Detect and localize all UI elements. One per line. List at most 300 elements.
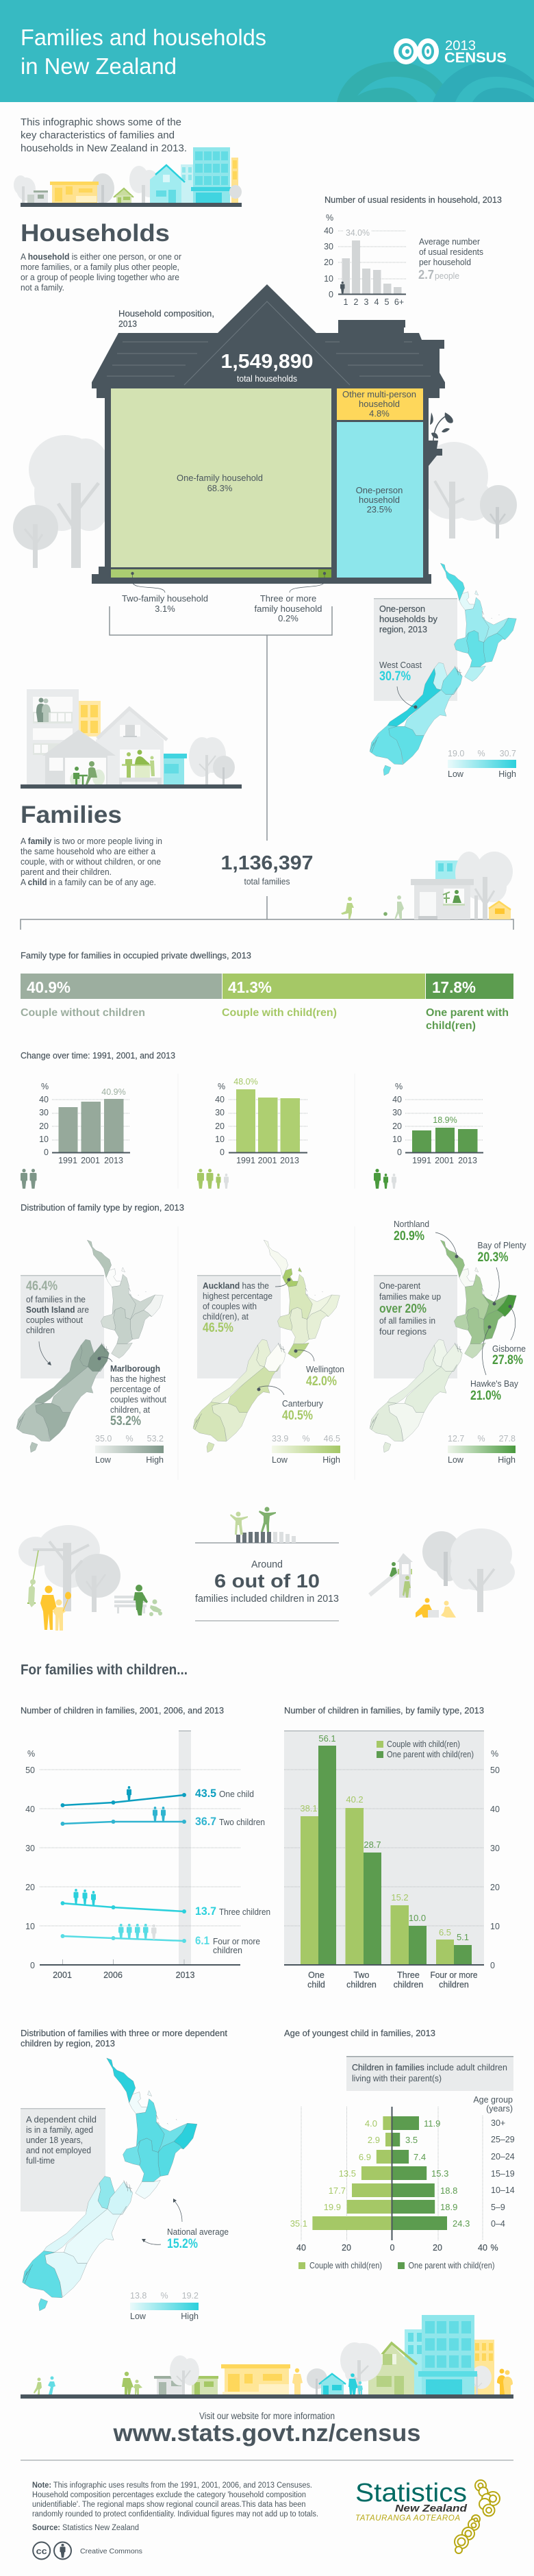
pyramid chart: age of youngest child: 20 [433,2243,442,2253]
bar chart: couple without children over time: % [41,1082,49,1091]
one-family household [111,388,331,567]
line chart: number of children over time: 50 [25,1766,35,1775]
callouts: two-family and three or more: Three or more [260,593,316,604]
map: one parent with children: four regions [379,1327,427,1337]
map: one-person households [370,563,516,779]
total households: 1,549,890 [220,351,314,373]
pyramid chart: age of youngest child: 15.3 [431,2168,448,2179]
pyramid chart: age of youngest child: 13.5 [339,2168,356,2179]
pyramid chart: age of youngest child: 4.0 [365,2118,377,2129]
series: two children [60,1807,265,1828]
pyramid chart: age of youngest child: 20 [342,2243,351,2253]
Statistics New Zealand logo: TATAURANGA AOTEAROA [355,2514,461,2523]
map: couples with children: 42.0% [306,1374,337,1389]
pyramid chart: age of youngest child: 10–14 [491,2185,515,2195]
stacked bar: family type: 41.3% [228,978,272,996]
bar chart: couple with children over time: 40 [215,1095,225,1104]
stacked bar: family type: child(ren) [426,1020,476,1032]
line chart: number of children over time: 2013 [176,1970,194,1980]
two-family household [111,569,318,578]
map: one parent with children: Hawke's Bay [470,1379,519,1389]
panel dividers [178,1074,355,1480]
bar chart: children by family type: 5.1 [457,1932,469,1942]
legend [130,2291,199,2321]
bar chart: couple without children over time: 2001 [81,1156,100,1165]
map: one-person households: households by [379,615,438,624]
series: four or more children: 6.1 [195,1934,209,1947]
heading: Households: Households [21,220,170,247]
map: one parent with children: 27.8% [492,1353,523,1367]
callout box [21,1275,104,1378]
series: two children: 36.7 [195,1815,216,1828]
family definition: A child in a family can be of any age. [21,878,156,887]
census logo: CENSUS [444,50,507,66]
bar chart: one parent over time: 0 [397,1148,402,1157]
chart: usual residents: 6+ [394,297,404,307]
bar chart: children by family type: 50 [490,1766,500,1775]
series: one child: 43.5 [195,1787,216,1800]
bar chart: couple with children over time: 1991 [236,1156,255,1165]
legend: Low [448,769,464,779]
average residents note [418,237,483,282]
intro text: This infographic shows some of the [21,117,181,128]
map: couples with children: 40.5% [282,1409,313,1423]
legend: % [477,1434,485,1444]
stacked bar: family type: 40.9% [27,978,71,996]
map: couples without children: couples without [110,1395,166,1404]
pyramid chart: age of youngest child [284,2029,515,2270]
series: four or more children [60,1924,260,1955]
legend: Low [448,1455,464,1465]
legend: High [146,1455,164,1465]
stacked bar: family type [21,974,513,1032]
legend: 19.0 [448,749,464,758]
bar chart: couple with children over time: 0 [220,1148,225,1157]
note and source: Note: This infographic uses results from the 1991, 2001, 2006, and 2013 Censuses. [32,2481,312,2490]
house: household composition [92,284,453,584]
chart: usual residents: Number of usual residents in household, 2013 [325,195,502,205]
legend: Couple with child(ren) [387,1739,460,1749]
bar chart: couple without children over time: 30 [39,1108,49,1117]
line chart: number of children over time: 2001 [53,1970,72,1980]
pyramid chart: age of youngest child: 24.3 [453,2218,470,2229]
legend: Low [95,1455,112,1465]
average residents note: per household [419,258,471,267]
legend: 19.2 [182,2291,199,2301]
map: couples with children: highest percentage [203,1291,272,1301]
bar chart: couple with children over time: 30 [215,1108,225,1117]
legend: 13.8 [130,2291,147,2301]
creative commons badge: cc [36,2546,47,2556]
household definition: not a family. [21,283,64,293]
bar chart: children by family type: 10 [490,1922,500,1931]
bar chart: children by family type: child [307,1980,325,1990]
heading: distribution by region: Distribution of family type by region, 2013 [21,1203,184,1213]
pyramid chart: age of youngest child: (years) [486,2104,513,2114]
line chart: number of children over time: Number of children in families, 2001, 2006, and 2013 [21,1706,224,1716]
heading: family type: Family type for families in occupied private dwellings, 2013 [21,951,251,961]
line chart: number of children over time: 2006 [103,1970,123,1980]
heading: Families: Families [21,802,122,828]
map: three or more dependent children: is in a family, aged [26,2125,93,2135]
total families: 1,136,397 [220,852,314,874]
census logo: 2013 [445,38,476,53]
bar chart: couple with children over time: 48.0% [233,1077,258,1087]
pyramid chart: age of youngest child: 0–4 [491,2219,505,2229]
illustration: park scene right [370,1528,515,1618]
map: one parent with children: 20.9% [394,1229,424,1243]
heading: distribution of larger families [21,2029,228,2048]
bar chart: children by family type: 0 [490,1961,495,1970]
intro text [21,117,187,154]
bar chart: children by family type: Three [397,1970,420,1980]
line chart: number of children over time: % [27,1749,35,1759]
pyramid chart: age of youngest child: 30+ [491,2118,505,2128]
bar chart: children by family type: Two [354,1970,370,1980]
callout: six out of ten families: 6 out of 10 [214,1570,320,1592]
legend: % [160,2291,168,2301]
intro text: households in New Zealand in 2013. [21,143,187,154]
legend: % [477,749,485,758]
three or more family household [318,569,331,578]
bar chart: children by family type: 15.2 [391,1892,409,1903]
bar chart: couple with children over time: 20 [215,1122,225,1131]
pyramid chart: age of youngest child: 3.5 [405,2135,418,2145]
pyramid chart: age of youngest child: % [490,2243,498,2253]
website call to action: www.stats.govt.nz/census [112,2420,420,2447]
chart: usual residents: 40 [324,226,333,236]
average residents note: of usual residents [419,247,483,257]
icon: one parent with children [374,1169,396,1189]
legend [377,1739,474,1759]
illustration: children playing by house [341,852,513,919]
creative commons badge: Creative Commons [80,2547,142,2555]
title: Families and households [21,25,266,50]
icon: pot plant [429,412,453,466]
legend [95,1434,164,1465]
legend: 35.0 [95,1434,112,1444]
map: couples with children: of couples with [203,1302,257,1311]
average residents note: people [435,271,459,281]
chart: usual residents: 5 [385,297,390,307]
line chart: number of children over time: 30 [25,1844,35,1853]
bar chart: one parent over time [374,1082,483,1189]
map: couples with children: child(ren), at [203,1312,249,1322]
legend: Low [130,2312,147,2321]
stacked bar: family type: Couple with child(ren) [222,1007,337,1019]
pyramid chart: age of youngest child: 40 [478,2243,487,2253]
Statistics New Zealand logo: Statistics [355,2479,467,2507]
bar chart: couple without children over time: 20 [39,1122,49,1131]
callout box [374,598,457,701]
illustration: park scene left [18,1525,162,1631]
bar chart: couple with children over time [197,1077,307,1189]
callout: six out of ten families: Around [251,1559,283,1570]
illustration: city skyline [14,147,242,207]
census logo [394,38,507,66]
total families: total families [244,876,290,887]
icon: couple [21,1169,37,1189]
bar chart: couple without children over time: 10 [39,1135,49,1144]
chart: usual residents: 3 [364,297,369,307]
chart: usual residents: 10 [324,274,333,284]
bar chart: children by family type: Number of children in families, by family type, 2013 [284,1706,484,1716]
map: one-person households: region, 2013 [379,625,427,634]
pyramid chart: age of youngest child: 6.9 [359,2152,371,2162]
household definition: A household is either one person, or one or [21,252,181,262]
legend: Low [272,1455,288,1465]
total families [220,852,314,887]
map: couples without children: children, at [110,1405,150,1415]
map: one parent with children: Northland [394,1219,429,1229]
legend: 27.8 [499,1434,516,1444]
pyramid chart: age of youngest child: 35.1 [290,2218,307,2229]
chart: usual residents: 4 [374,297,379,307]
pyramid chart: age of youngest child: 0 [390,2243,395,2253]
note and source: unidentifiable'. The regional maps show regional council areas.This data has been [32,2501,305,2509]
map: three or more dependent children: under 18 years, [26,2135,83,2145]
map: one-person households: West Coast [379,660,422,670]
legend: One parent with child(ren) [387,1750,474,1759]
bar chart: one parent over time: 40 [392,1095,402,1104]
house: household composition: 2013 [118,319,137,329]
series: four or more children: children [213,1946,242,1955]
bar chart: children by family type [284,1706,500,1990]
bar chart: couple without children over time: 2013 [104,1156,123,1165]
chart: usual residents: 30 [324,242,333,251]
heading: change over time: Change over time: 1991, 2001, and 2013 [21,1051,175,1061]
map: couples without children: has the highest [110,1374,166,1384]
bar chart: children by family type: % [491,1749,498,1759]
bar chart: couple without children over time: 40.9% [101,1087,126,1097]
legend [272,1434,340,1465]
bar chart: couple with children over time: 2001 [258,1156,277,1165]
stacked bar: family type: One parent with [426,1007,509,1019]
map: three or more dependent children: 15.2% [167,2237,198,2251]
legend [448,749,516,779]
note and source: randomly rounded to protect confidentiality. Individual figures may not add up to totals. [32,2510,318,2518]
legend: High [181,2312,199,2321]
chart: usual residents: 34.0% [346,228,370,238]
legend [298,2261,494,2270]
map: couples without children: 46.4% [26,1279,58,1293]
map: couples with children: 46.5% [203,1321,233,1335]
legend [448,1434,516,1465]
line chart: number of children over time: 20 [25,1883,35,1892]
house: household composition: Household composition, [118,309,214,319]
bar chart: children by family type: One [308,1970,325,1980]
bar chart: children by family type: 28.7 [364,1840,381,1850]
bar chart: couple with children over time: 2013 [280,1156,299,1165]
stacked bar: family type: Couple without children [21,1007,145,1019]
heading: distribution of larger families: children by region, 2013 [21,2039,115,2048]
other multi-person household: household [359,399,400,409]
bar chart: children by family type: 30 [490,1844,500,1853]
map: couples without children: of families in the [26,1295,86,1304]
callouts: two-family and three or more: Two-family household [122,593,208,604]
one-family household: One-family household [177,473,263,483]
pyramid chart: age of youngest child: 40 [296,2243,306,2253]
pyramid chart: age of youngest child: 7.4 [414,2152,426,2162]
bar chart: one parent over time: 20 [392,1122,402,1131]
line chart: number of children over time [21,1706,270,1980]
legend: Couple with child(ren) [309,2261,382,2270]
map: couples without children: children [26,1326,55,1335]
footer divider [21,2460,513,2461]
illustration: trees behind house [13,435,517,568]
note and source [32,2481,318,2532]
map: one parent with children: of all families in [379,1316,435,1326]
chart: usual residents: 1 [344,297,348,307]
one-person household [337,422,423,578]
series: four or more children: Four or more [213,1937,260,1946]
chart: usual residents: 20 [324,258,333,267]
header banner [0,0,534,102]
legend: One parent with child(ren) [408,2261,494,2270]
callout box [374,1275,457,1378]
callout box: Children in families include adult children [352,2063,507,2072]
callouts: two-family and three or more: family household [255,604,322,614]
legend: 30.7 [500,749,516,758]
legend: 12.7 [448,1434,464,1444]
bar chart: one parent over time: 10 [392,1135,402,1144]
one-family household: 68.3% [207,483,233,493]
map: three or more dependent children: National average [167,2227,229,2237]
bar chart: one parent over time: % [395,1082,403,1091]
map: one parent with children [370,1219,526,1465]
title [21,25,266,79]
map: couples with children: Canterbury [282,1399,324,1409]
bar chart: couple without children over time: 0 [44,1148,49,1157]
bar chart: children by family type: children [439,1980,469,1990]
map: couples without children: 53.2% [110,1414,141,1428]
bar chart: one parent over time: 1991 [412,1156,431,1165]
series: three children: 13.7 [195,1905,216,1918]
illustration: family homes [21,689,242,789]
callouts: two-family and three or more: 0.2% [278,613,298,623]
household definition [21,252,181,293]
legend: High [498,769,516,779]
pyramid chart: age of youngest child: Age group [473,2095,513,2105]
legend: 46.5 [324,1434,340,1444]
callout: six out of ten families: families included children in 2013 [195,1594,339,1605]
family definition: couple, with or without children, or one [21,857,161,867]
map: couples without children [16,1240,166,1465]
chart: usual residents: 0 [329,290,333,299]
bar chart: children by family type: 40.2 [346,1794,364,1805]
total households [220,351,314,384]
one-person household: One-person [356,485,403,495]
pyramid chart: age of youngest child: 5–9 [491,2203,505,2212]
map: three or more dependent children: A dependent child [26,2115,97,2125]
series: one child [60,1786,254,1807]
callouts: two-family and three or more: 3.1% [155,604,175,614]
legend: High [498,1455,516,1465]
note and source: Household composition percentages exclude the category 'household composition [32,2491,306,2499]
bar chart: couple without children over time: 40 [39,1095,49,1104]
map: couples without children: couples without [26,1315,83,1325]
bar chart: children by family type: 40 [490,1805,500,1814]
Statistics New Zealand logo: New Zealand [395,2503,468,2514]
total households: total households [237,373,297,384]
pyramid chart: age of youngest child: Age of youngest child in families, 2013 [284,2029,435,2038]
legend: % [125,1434,134,1444]
intro text: key characteristics of families and [21,130,175,141]
legend: 33.9 [272,1434,288,1444]
bar chart: children by family type: 38.1 [300,1803,318,1813]
icon: couple with children [197,1169,229,1189]
bar chart: couple with children over time: % [218,1082,225,1091]
callouts: two-family and three or more [122,572,326,623]
bar chart: one parent over time: 18.9% [433,1115,457,1125]
line chart: number of children over time: 0 [30,1961,35,1970]
map: one parent with children: Gisborne [492,1344,526,1354]
average residents note: 2.7 [418,268,434,282]
creative commons badge [33,2542,142,2560]
bar chart: one parent over time: 30 [392,1108,402,1117]
pyramid chart: age of youngest child: 15–19 [491,2169,515,2179]
map: one parent with children: families make up [379,1292,441,1302]
chart: usual residents [324,195,502,307]
legend: 53.2 [147,1434,164,1444]
icon: person [340,282,345,293]
family definition: parent and their children. [21,867,112,877]
legend: High [322,1455,340,1465]
map: couples with children: Auckland has the [203,1281,269,1291]
average residents note: Average number [419,237,480,247]
website call to action: Visit our website for more information [199,2410,335,2421]
pyramid chart: age of youngest child: 18.8 [440,2185,457,2196]
map: one parent with children: Bay of Plenty [478,1241,526,1250]
pyramid chart: age of youngest child: 25–29 [491,2135,515,2144]
map: couples without children: Marlborough [110,1364,160,1374]
note and source: Source: Statistics New Zealand [32,2524,139,2532]
bar chart: children by family type: 6.5 [439,1927,451,1937]
other multi-person household [337,388,423,420]
bar chart: children by family type: 56.1 [318,1733,336,1744]
bar chart: couple with children over time: 10 [215,1135,225,1144]
callout box [346,2056,513,2091]
series: three children: Three children [219,1907,270,1917]
pyramid chart: age of youngest child: 17.7 [329,2185,346,2196]
stacked bar: family type: 17.8% [432,978,476,996]
family definition: the same household who are either a [21,847,155,856]
line chart: number of children over time: 10 [25,1922,35,1931]
household definition: or a group of people living together who are [21,273,179,282]
bar chart: children by family type: children [346,1980,377,1990]
pyramid chart: age of youngest child: 18.9 [440,2202,457,2212]
map: three or more dependent children: and not employed [26,2146,91,2155]
callout box [21,2108,105,2212]
household definition: more families, or a family plus other people, [21,262,179,272]
bar chart: couple without children over time [21,1082,130,1189]
callout: six out of ten families [195,1507,339,1621]
family definition: A family is two or more people living in [21,837,162,846]
callout box: living with their parent(s) [352,2074,442,2083]
pyramid chart: age of youngest child: 11.9 [424,2118,440,2129]
pyramid chart: age of youngest child: 20–24 [491,2152,515,2162]
line chart: number of children over time: 40 [25,1805,35,1814]
map: one-person households: 30.7% [379,669,411,684]
one-person household: household [359,495,400,505]
map: one parent with children: One-parent [379,1281,420,1291]
bar chart: children by family type: 20 [490,1883,500,1892]
one-person household: 23.5% [367,504,392,515]
map: three or more dependent children [21,2058,229,2321]
map: couples without children: South Island are [26,1305,89,1315]
title: in New Zealand [21,53,177,79]
pyramid chart: age of youngest child: 2.9 [368,2135,380,2145]
